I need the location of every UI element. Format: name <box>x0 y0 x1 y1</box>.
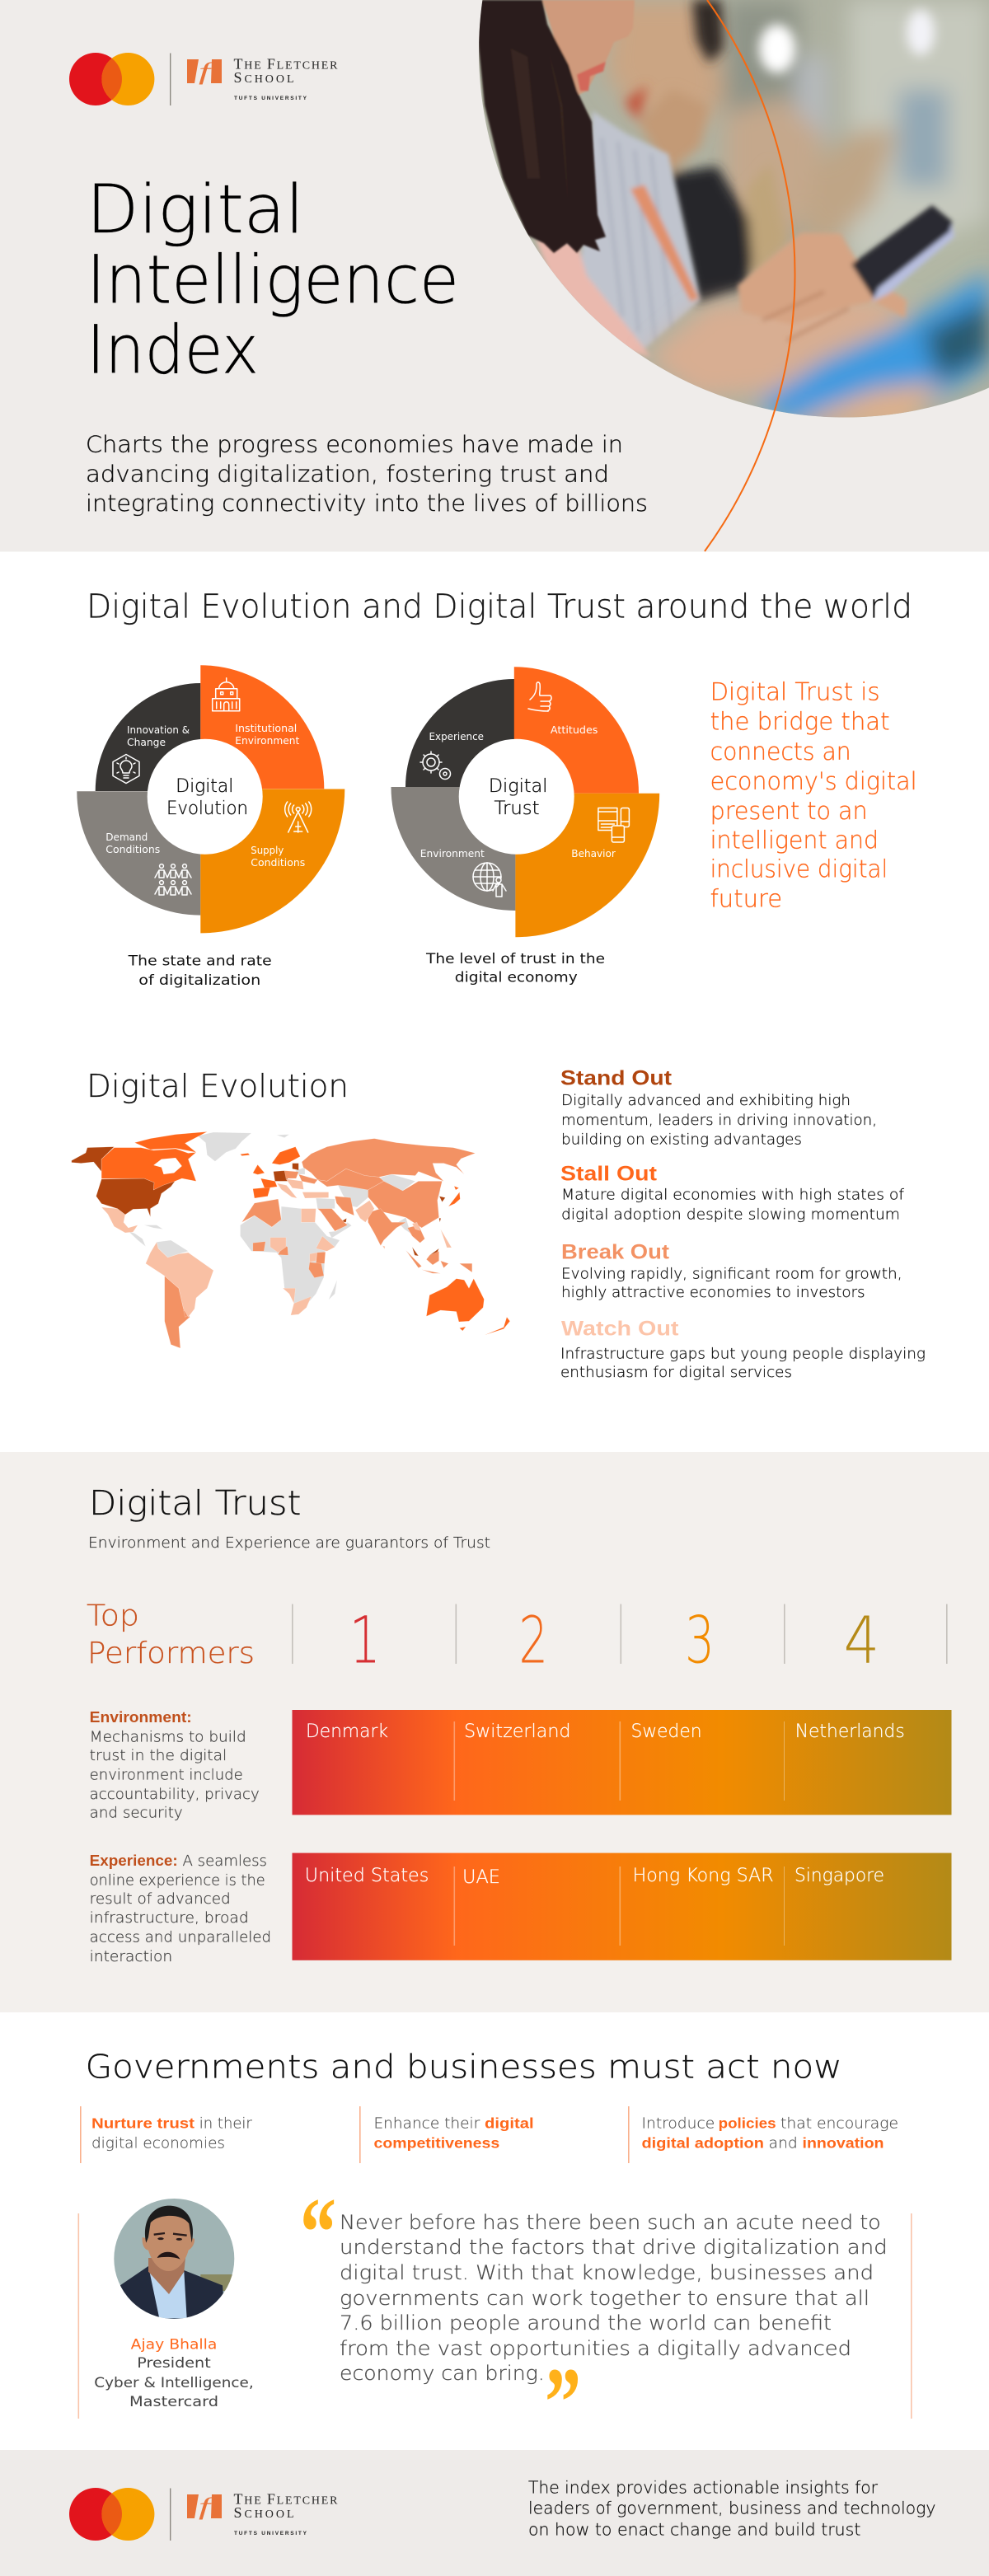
heading: governments and businesses: Governments and businesses must act now <box>86 2049 842 2087</box>
labels: segment names: Attitudes <box>551 724 598 736</box>
text: hero subtitle: advancing digitalization, fostering trust and <box>86 461 609 488</box>
gray countries <box>129 1132 441 1304</box>
labels: segment names: Behavior <box>571 848 616 859</box>
caption: level of trust: digital economy <box>455 970 578 986</box>
legend item: stall out: Mature digital economies with high states of <box>561 1186 905 1203</box>
labels: segment names <box>105 723 305 869</box>
bar: experience top performers: Hong Kong SAR <box>633 1866 774 1886</box>
quote text: governments can work together to ensure that all <box>340 2287 869 2310</box>
table header: rank numbers: 4 <box>844 1604 879 1678</box>
labels: segment names: Institutional <box>235 723 297 734</box>
labels: segment names: Change <box>127 737 166 748</box>
title: Index <box>87 311 259 389</box>
action: nurture trust: Nurture trust <box>91 2115 195 2131</box>
legend item: stall out: digital adoption despite slowing momentum <box>561 1206 900 1223</box>
action: introduce policies: that encourage <box>780 2115 898 2132</box>
legend item: break out: highly attractive economies to investors <box>561 1284 865 1301</box>
labels: segment names: Conditions <box>251 857 305 869</box>
quote text <box>340 2211 888 2385</box>
text: environment description: accountability, privacy <box>90 1786 260 1803</box>
title: Digital <box>87 171 304 249</box>
text: speaker name and title: President <box>137 2355 211 2372</box>
icon: globe and person <box>473 863 506 897</box>
quote text: Never before has there been such an acute need to <box>340 2211 881 2234</box>
segment: environment <box>391 787 515 911</box>
table header: rank numbers: 2 <box>519 1604 548 1678</box>
caption: level of trust <box>425 951 605 986</box>
icon: government building <box>213 678 240 711</box>
bar: experience top performers: UAE <box>462 1867 500 1888</box>
center circle <box>459 739 574 855</box>
label: digital evolution center: Evolution <box>166 799 248 819</box>
text: experience description: Experience: <box>90 1852 178 1869</box>
action: introduce policies: digital adoption <box>641 2135 764 2152</box>
labels: segment names <box>420 724 616 859</box>
bar: environment top performers: Switzerland <box>464 1721 570 1742</box>
action: introduce policies: policies <box>719 2115 776 2131</box>
text: speaker name and title: Cyber & Intelligence, <box>94 2375 254 2391</box>
text: environment description: environment include <box>90 1767 243 1784</box>
text: experience description: interaction <box>90 1948 172 1965</box>
text: The Fletcher School: SCHOOL <box>234 69 293 86</box>
callout: digital trust is the bridge: the bridge that <box>710 707 890 735</box>
logo: Mastercard and The Fletcher School <box>69 53 338 105</box>
caption: state and rate: The state and rate <box>128 953 272 970</box>
action: introduce policies: innovation <box>803 2135 884 2152</box>
action: introduce policies: Introduce <box>641 2115 715 2132</box>
callout: digital trust is the bridge: inclusive digital <box>710 855 888 883</box>
text: experience description: infrastructure, broad <box>90 1909 249 1927</box>
text: experience description: access and unparalleled <box>90 1929 271 1946</box>
labels: segment names: Supply <box>251 845 284 856</box>
action: enhance competitiveness: digital <box>485 2115 534 2131</box>
legend item: break out: Break Out <box>561 1241 670 1264</box>
chart: digital trust donut <box>391 667 659 937</box>
legend item: stand out: momentum, leaders in driving innovation, <box>561 1112 877 1129</box>
legend item: break out: Evolving rapidly, significant room for growth, <box>561 1266 902 1283</box>
label: digital evolution center: Digital <box>176 776 233 797</box>
action: nurture trust <box>80 2106 253 2163</box>
chart: world map <box>72 1131 510 1348</box>
text: hero subtitle: integrating connectivity into the lives of billions <box>86 489 648 517</box>
callout: digital trust is the bridge: present to an <box>710 797 868 825</box>
title <box>87 171 459 389</box>
text: experience description: online experience is the <box>90 1871 265 1889</box>
icon: light bulb hexagon <box>113 755 139 783</box>
stall out countries <box>101 1131 510 1335</box>
labels: segment names: Environment <box>235 735 300 747</box>
text: environment description: Environment: <box>90 1709 192 1726</box>
label: top performers: Performers <box>87 1637 255 1670</box>
quote text: 7.6 billion people around the world can benefit <box>340 2311 832 2335</box>
icon: Mastercard circles <box>69 53 154 105</box>
quote text: from the vast opportunities a digitally advanced <box>340 2337 851 2360</box>
text: footer statement <box>528 2478 935 2540</box>
icon: opening quote mark: “ <box>300 2177 336 2287</box>
bar: environment top performers <box>292 1710 951 1815</box>
action: enhance competitiveness <box>359 2106 534 2163</box>
action: enhance competitiveness: competitiveness <box>374 2135 499 2152</box>
text: footer statement: leaders of government, business and technology <box>528 2499 935 2518</box>
legend: digital evolution categories <box>560 1067 926 1381</box>
table header: rank numbers <box>292 1604 948 1678</box>
icon: Fletcher lf mark: f <box>199 58 215 85</box>
legend item: watch out: Watch Out <box>561 1318 679 1341</box>
footer logo: Mastercard and The Fletcher School <box>69 2488 338 2541</box>
icon: closing quote mark: ” <box>545 2347 581 2457</box>
quote text: understand the factors that drive digitalization and <box>340 2236 888 2259</box>
chart: digital evolution donut <box>77 665 345 933</box>
callout: digital trust is the bridge: Digital Trust is <box>710 677 880 705</box>
white water: hudson bay <box>153 1158 182 1174</box>
bar: experience top performers: United States <box>305 1866 429 1886</box>
footer logo: Mastercard and The Fletcher School: TUFTS UNIVERSITY <box>234 2531 307 2536</box>
heading: digital evolution: Digital Evolution <box>87 1068 349 1104</box>
text: The Fletcher School: TUFTS UNIVERSITY <box>234 96 307 101</box>
portrait: Ajay Bhalla <box>114 2199 237 2321</box>
action: nurture trust: in their <box>199 2115 253 2132</box>
bar: experience top performers <box>292 1853 951 1960</box>
title: Intelligence <box>87 242 459 320</box>
bar: environment top performers: Sweden <box>631 1721 702 1742</box>
labels: segment names: Conditions <box>105 844 160 855</box>
text: speaker name and title: Mastercard <box>129 2394 218 2410</box>
legend item: stand out: building on existing advantages <box>561 1131 802 1148</box>
callout: digital trust is the bridge: future <box>710 885 782 913</box>
heading: digital evolution and digital trust: Digital Evolution and Digital Trust around the world <box>87 588 912 625</box>
bar: experience top performers: Singapore <box>794 1866 884 1886</box>
text: environment description: trust in the digital <box>90 1747 227 1764</box>
hero photo: people using smartphones <box>462 0 989 438</box>
text: hero subtitle: Charts the progress economies have made in <box>86 431 623 458</box>
text: speaker name and title <box>94 2337 254 2410</box>
quote text: digital trust. With that knowledge, businesses and <box>340 2261 874 2284</box>
footer logo: Mastercard and The Fletcher School: SCHOOL <box>234 2504 293 2521</box>
action: introduce policies: and <box>769 2136 798 2152</box>
icon: thumbs up <box>528 682 551 711</box>
heading: digital trust: Digital Trust <box>89 1483 302 1523</box>
segment: supply conditions <box>200 789 345 933</box>
legend item: stand out: Stand Out <box>560 1067 673 1090</box>
text: experience description: A seamless <box>183 1852 267 1870</box>
label: top performers <box>87 1599 255 1670</box>
footer logo: Mastercard and The Fletcher School: THE FLETCHER <box>234 2490 338 2507</box>
quote text: economy can bring. <box>340 2362 545 2385</box>
action: enhance competitiveness: Enhance their <box>374 2115 480 2132</box>
table header: rank numbers: 3 <box>685 1604 715 1678</box>
text: footer statement: on how to enact change and build trust <box>528 2520 860 2540</box>
table header: rank numbers: 1 <box>349 1604 381 1678</box>
text: experience description <box>90 1852 271 1965</box>
watch out countries <box>101 1179 452 1317</box>
labels: segment names: Innovation & <box>127 724 190 736</box>
legend item: stand out: Digitally advanced and exhibiting high <box>561 1092 851 1109</box>
icon: people group <box>155 864 191 895</box>
panel: footer background <box>0 2450 989 2576</box>
action: introduce policies <box>628 2106 898 2163</box>
segment: behavior <box>515 794 659 937</box>
segment: experience <box>405 679 514 787</box>
text: digital trust subheading: Environment and Experience are guarantors of Trust <box>88 1534 490 1552</box>
label: digital trust center <box>489 776 547 819</box>
break out countries <box>165 1139 476 1348</box>
label: digital trust center: Digital <box>489 776 547 797</box>
panel: digital trust background <box>0 1452 989 2012</box>
bar: environment top performers: Netherlands <box>795 1721 905 1742</box>
caption: state and rate: of digitalization <box>138 972 260 989</box>
legend item: watch out: Infrastructure gaps but young people displaying <box>560 1345 926 1362</box>
text: footer statement: The index provides actionable insights for <box>528 2478 879 2498</box>
segment: demand conditions <box>77 791 200 916</box>
callout: digital trust is the bridge: economy's digital <box>710 767 917 795</box>
caption: level of trust: The level of trust in the <box>425 951 605 967</box>
action: nurture trust: digital economies <box>91 2136 225 2152</box>
legend item: break out <box>561 1241 902 1301</box>
icon: gears <box>420 752 450 780</box>
legend item: stand out <box>560 1067 877 1148</box>
footer logo: Mastercard and The Fletcher School: f <box>199 2493 215 2520</box>
label: digital evolution center <box>166 776 248 819</box>
icon: antenna tower <box>285 802 312 832</box>
legend item: stall out <box>560 1163 905 1223</box>
text: hero subtitle <box>86 431 648 517</box>
segment: institutional environment <box>200 665 324 789</box>
quote frame lines <box>77 2213 912 2419</box>
segment: innovation and change <box>96 683 200 791</box>
text: environment description <box>90 1709 260 1822</box>
segment: attitudes <box>514 667 639 794</box>
icon: Fletcher lf mark <box>187 58 222 85</box>
labels: segment names: Demand <box>105 831 148 843</box>
text: The Fletcher School <box>234 56 338 101</box>
labels: segment names: Environment <box>420 848 485 859</box>
callout: digital trust is the bridge: intelligent and <box>710 826 879 854</box>
callout: digital trust is the bridge: connects an <box>710 738 851 766</box>
bar: environment top performers: Denmark <box>306 1721 388 1742</box>
stand out countries <box>72 1147 445 1256</box>
caption: state and rate <box>128 953 272 989</box>
legend item: watch out: enthusiasm for digital services <box>560 1364 792 1381</box>
decorative arc <box>705 0 795 551</box>
legend item: watch out <box>560 1318 926 1381</box>
label: top performers: Top <box>87 1599 139 1633</box>
text: experience description: result of advanced <box>90 1890 231 1908</box>
text: environment description: and security <box>90 1805 183 1822</box>
callout: digital trust is the bridge <box>710 677 917 913</box>
text: The Fletcher School: THE FLETCHER <box>234 56 338 73</box>
legend item: stall out: Stall Out <box>560 1163 658 1186</box>
text: speaker name and title: Ajay Bhalla <box>131 2337 217 2354</box>
panel: hero background <box>0 0 989 552</box>
center circle <box>148 739 263 855</box>
icon: devices <box>598 808 629 842</box>
labels: segment names: Experience <box>429 731 484 742</box>
text: environment description: Mechanisms to build <box>90 1729 246 1745</box>
label: digital trust center: Trust <box>494 799 539 819</box>
